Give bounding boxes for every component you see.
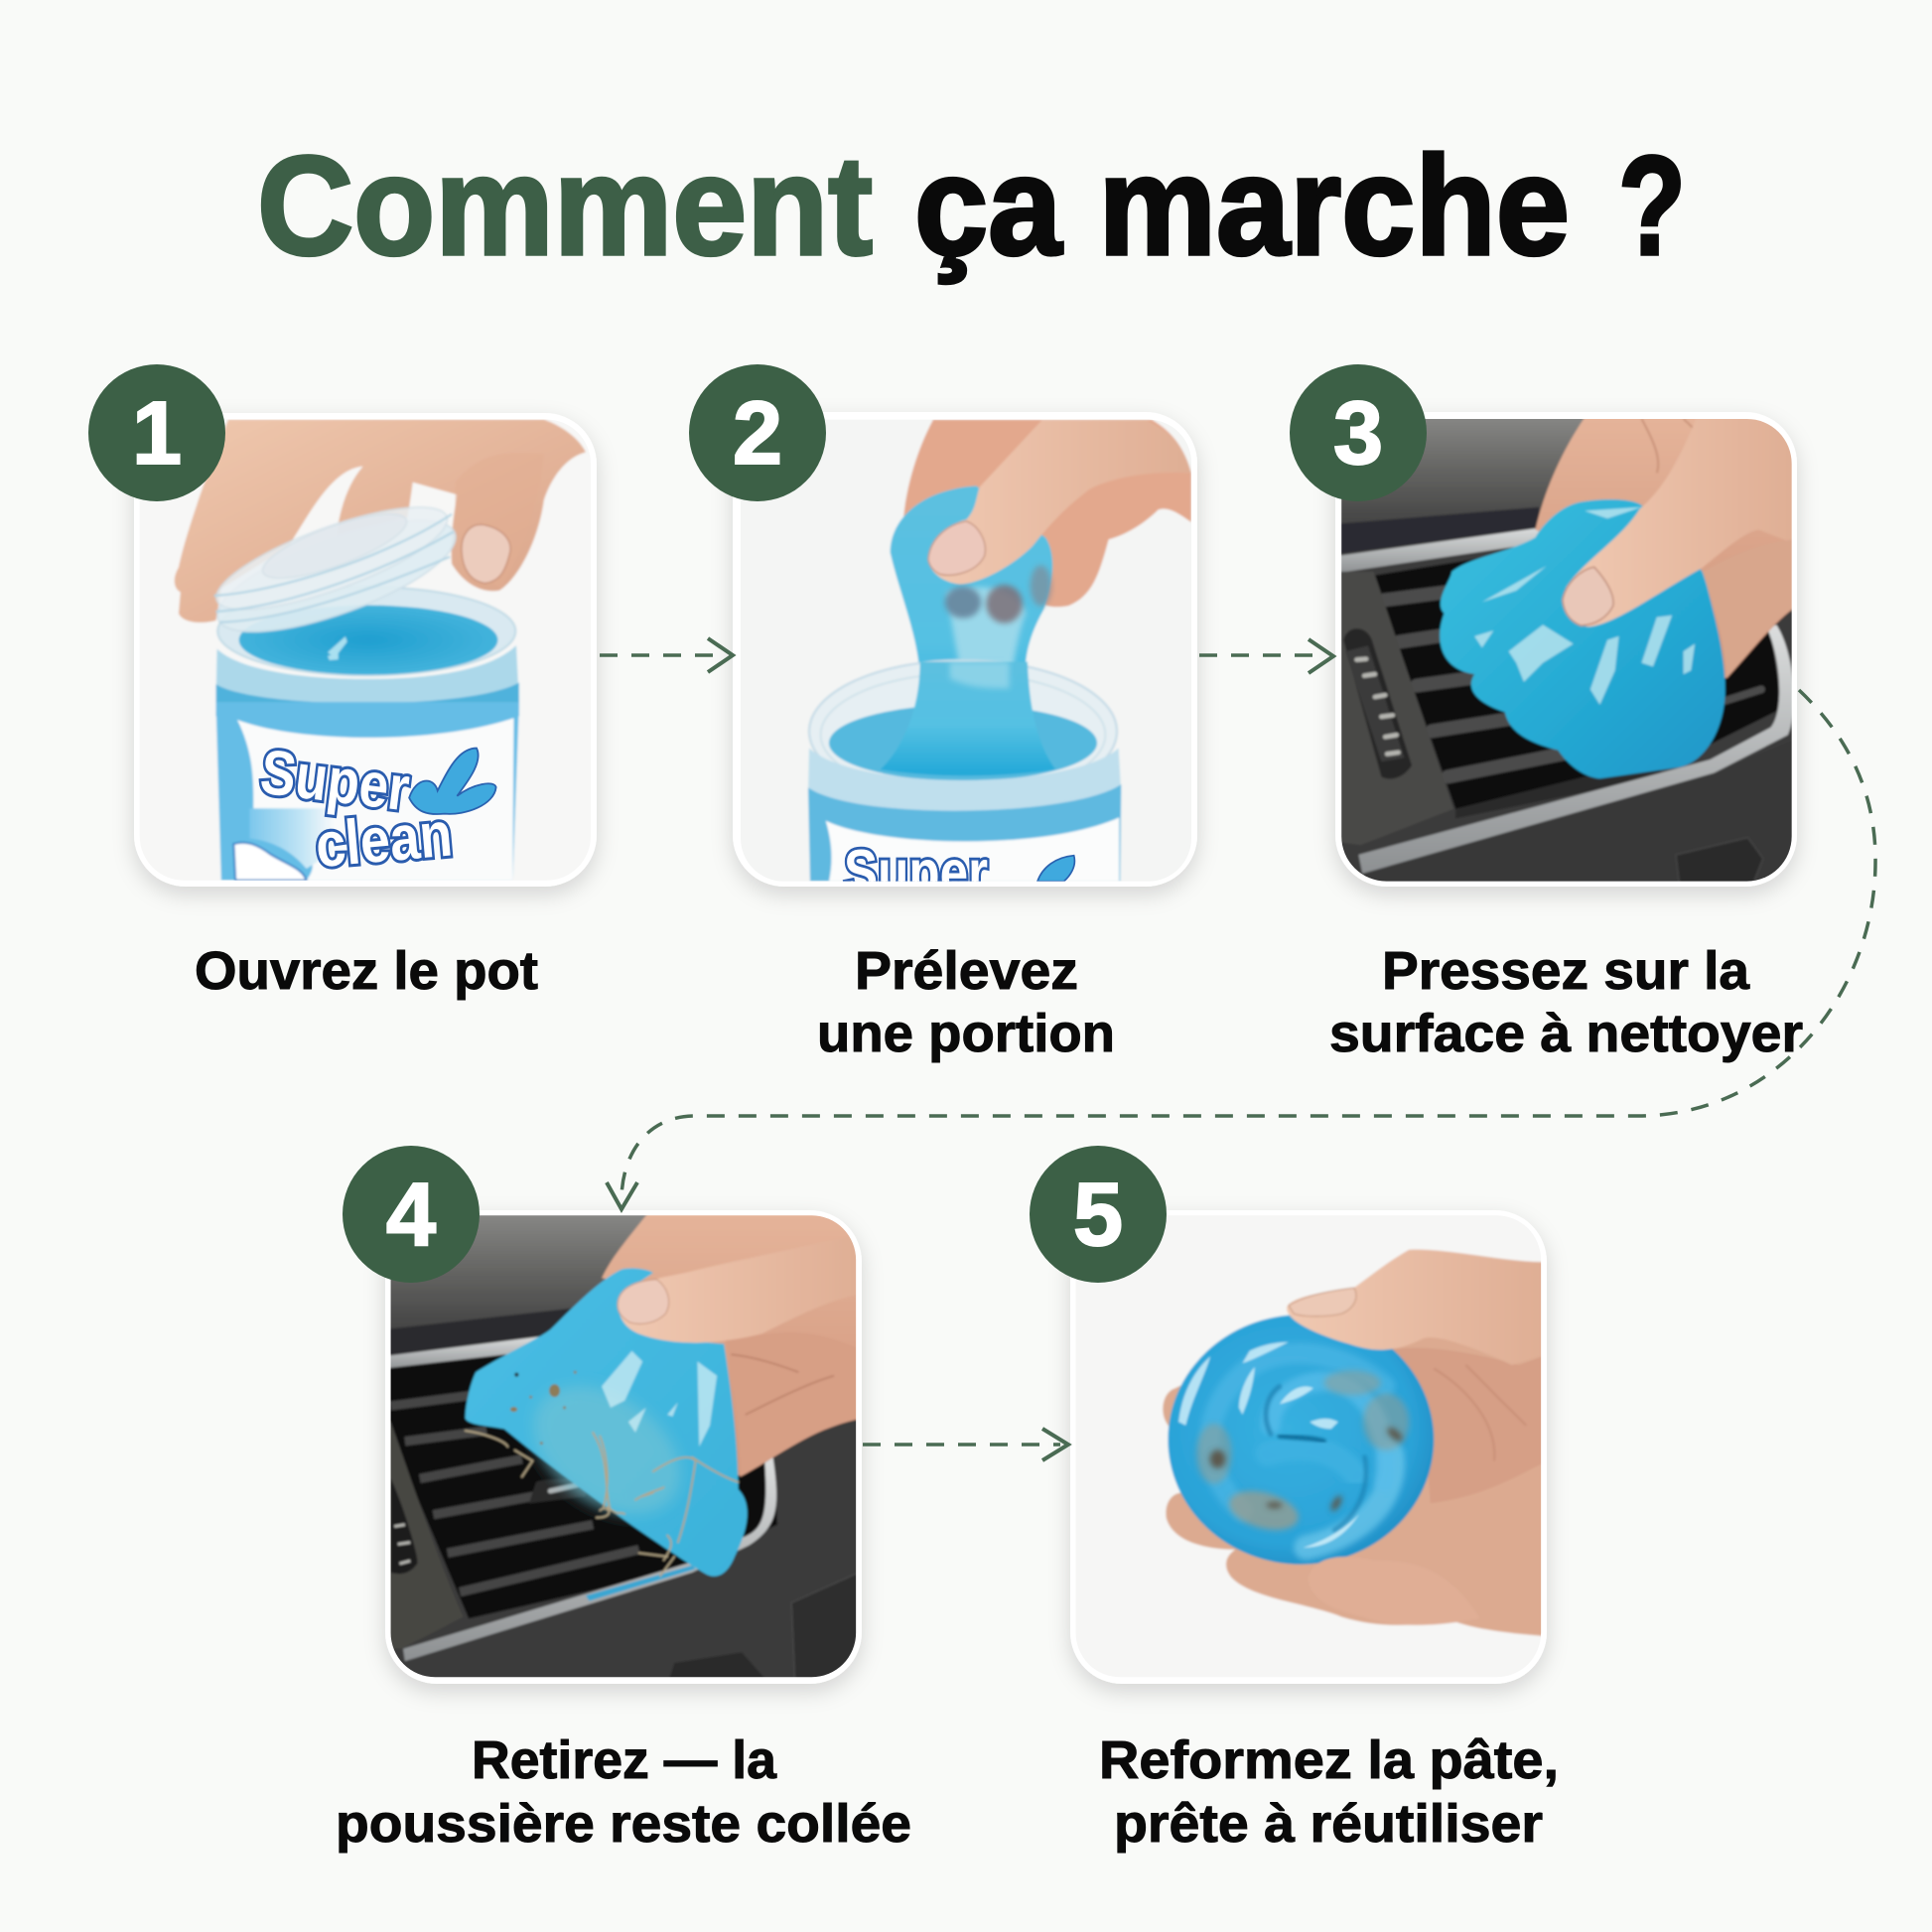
caption step 4: poussière reste collée [336,1794,911,1854]
caption step 4 [336,1730,911,1854]
photo: taking a portion [735,414,1198,907]
photo: removing dust from the vent [383,1209,863,1684]
arrow: step 3 to step 4 [607,690,1875,1209]
caption step 3: surface à nettoyer [1329,1004,1803,1063]
badge 5 [1030,1146,1167,1283]
ball highlights [1178,1342,1359,1548]
photo: pressing on the vent [1334,412,1797,887]
card frame [733,412,1197,887]
arrow: step 2 to step 3 [1199,639,1333,673]
badge 3: 3 [1333,384,1383,483]
photo: opening the jar [133,411,601,887]
caption step 2: Prélevez [855,941,1078,1001]
caption step 5 [1099,1730,1559,1854]
vent slats [391,1395,639,1592]
caption step 1: Ouvrez le pot [195,941,538,1001]
step 3 panel [1334,412,1797,887]
badge 4 [343,1146,480,1283]
caption step 4: Retirez — la [472,1730,777,1790]
gel highlights [602,1351,717,1447]
caption step 2: une portion [817,1004,1115,1063]
step 1 panel [133,411,601,887]
caption step 2 [817,941,1115,1063]
badge 1 [88,364,225,501]
photo: reshaping the paste [1068,1209,1548,1684]
title: ? [1618,127,1686,285]
jar label logo [842,846,1076,882]
card frame [134,413,597,887]
title: ça marche [914,127,1570,285]
step 5 panel [1068,1209,1548,1684]
arrow: step 1 to step 2 [600,638,733,672]
card frame [1335,412,1797,887]
dust and hair [466,1431,739,1576]
card frame [1070,1210,1547,1684]
vent slats [1384,591,1761,776]
jar label logo: clean [313,798,455,881]
jar label logo: Super [844,838,988,907]
badge 4: 4 [386,1166,436,1265]
title [257,127,1686,285]
caption step 3: Pressez sur la [1382,941,1750,1001]
jar label logo: Super [257,737,413,824]
jar label logo [258,747,497,870]
title: Comment [257,127,873,285]
step 4 panel [383,1209,863,1684]
dust patches [1196,1370,1409,1537]
badge 3 [1290,364,1427,501]
badge 2 [689,364,826,501]
caption step 5: Reformez la pâte, [1099,1730,1559,1790]
ball swirl [1210,1353,1392,1548]
badge 5: 5 [1073,1166,1123,1265]
gel highlights [1474,507,1695,705]
badge 2: 2 [733,384,782,483]
card frame [385,1210,862,1684]
step 2 panel [733,412,1198,907]
badge 1: 1 [132,384,182,483]
caption step 3 [1329,941,1803,1063]
caption step 5: prête à réutiliser [1114,1794,1543,1854]
arrow: step 4 to step 5 [863,1429,1068,1460]
